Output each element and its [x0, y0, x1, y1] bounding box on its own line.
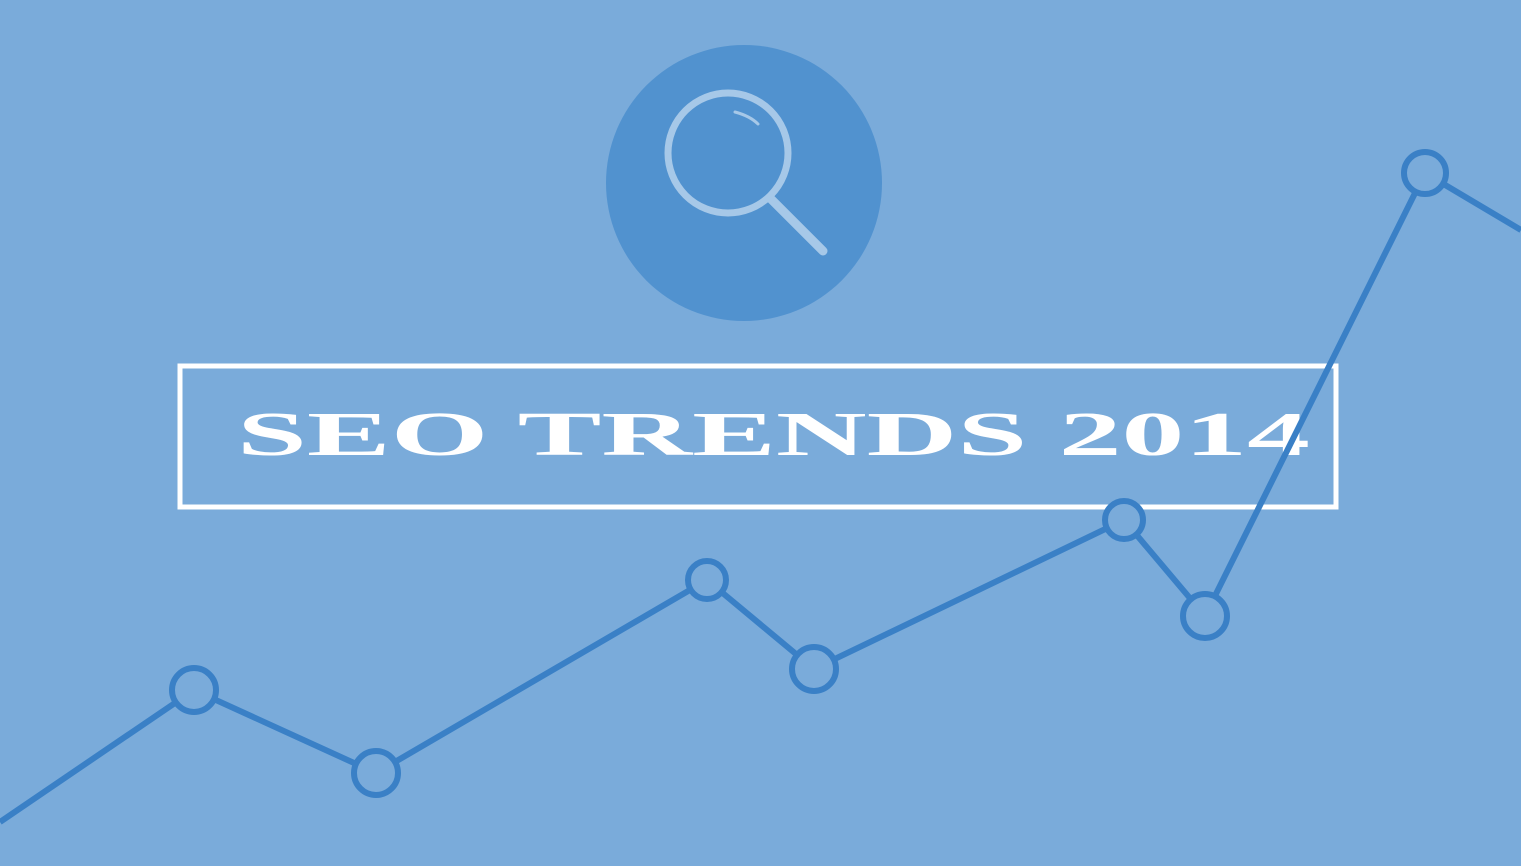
line chart — [0, 152, 1521, 822]
title box — [180, 366, 1336, 507]
icon: magnifier badge — [606, 45, 882, 321]
title: SEO TRENDS 2014 — [237, 401, 1310, 469]
